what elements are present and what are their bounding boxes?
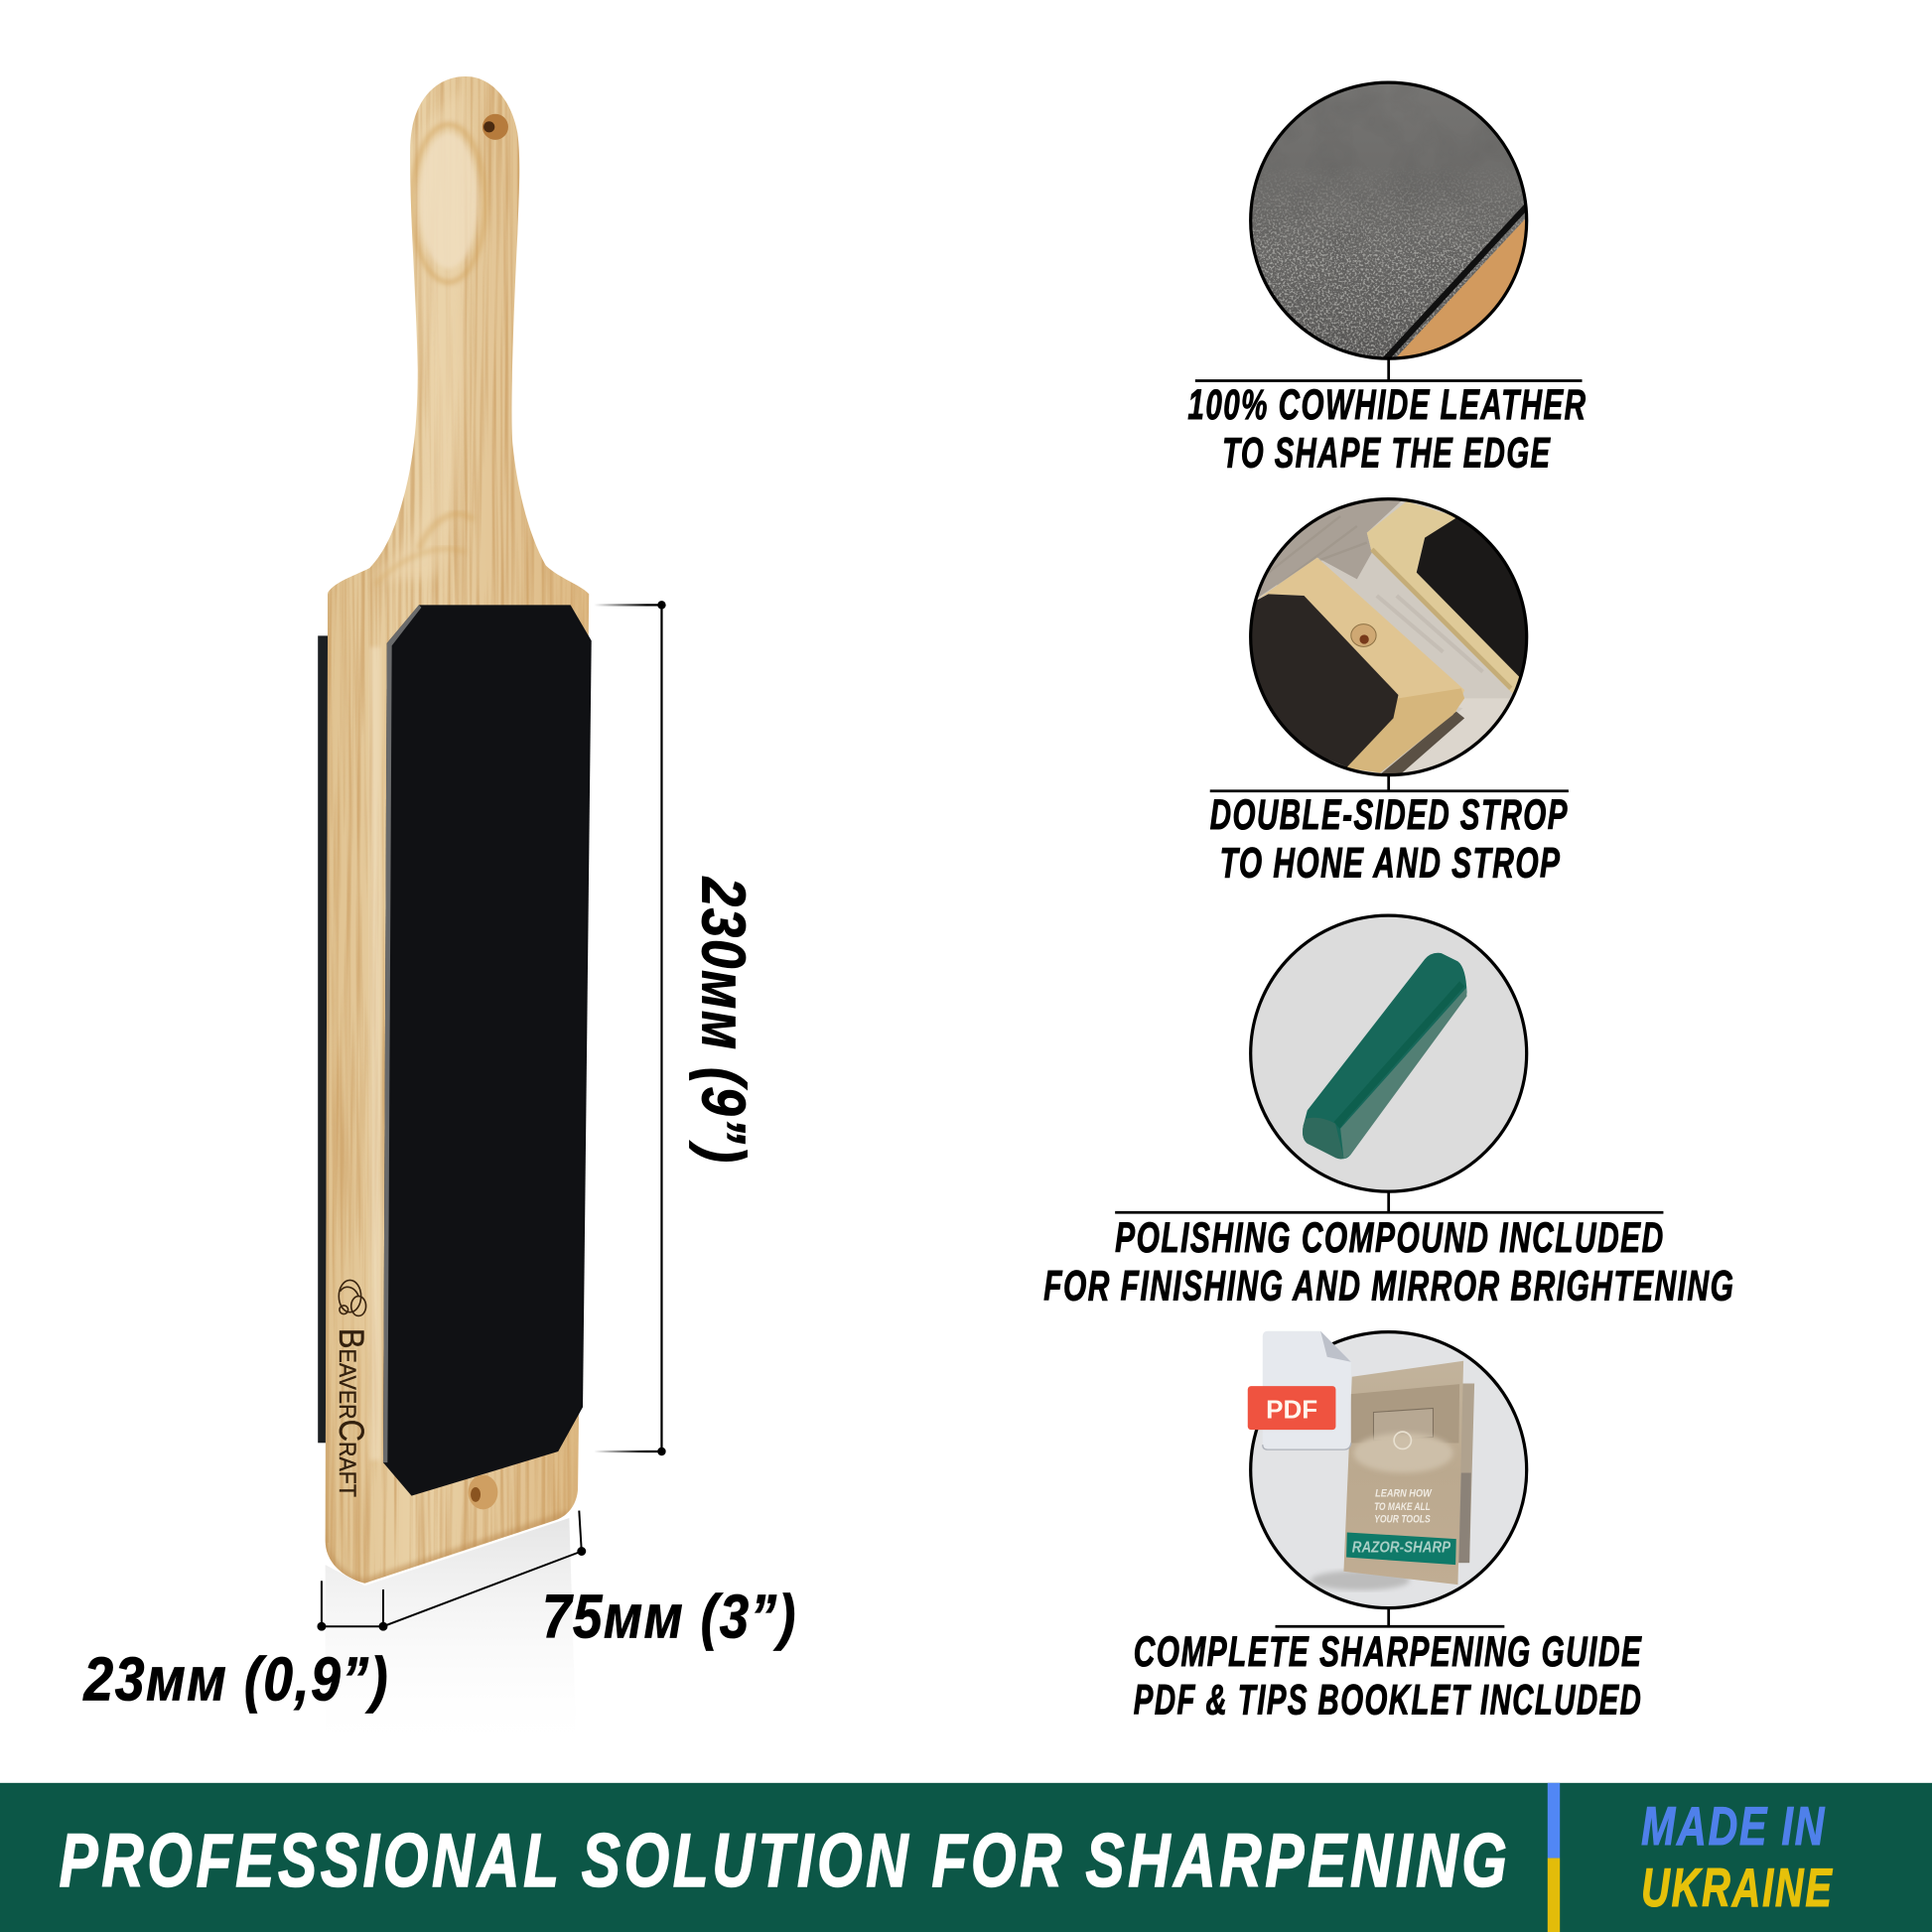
leader line (1115, 1191, 1663, 1212)
bottom banner (0, 1783, 1932, 1932)
engraved brand name: BeaverCraft (332, 1328, 369, 1497)
Ukraine label: UKRAINE (1641, 1858, 1834, 1918)
circle photo: booklet: TO MAKE ALL (1374, 1501, 1431, 1513)
width label: 75мм (3”) (542, 1583, 797, 1651)
icon: PDF file: PDF (1266, 1394, 1317, 1424)
leather strop paddle (314, 68, 598, 1595)
made in label: MADE IN (1641, 1796, 1826, 1857)
circle photo: leather close-up (1252, 83, 1525, 357)
caption: TO SHAPE THE EDGE (1222, 429, 1552, 476)
circle photo: green compound bar (1252, 917, 1525, 1189)
feature: sharpening guide (1134, 1324, 1642, 1723)
feature: double-sided strop (1210, 493, 1569, 887)
circle photo: two strops (1252, 500, 1525, 773)
feature: cowhide leather (1187, 73, 1587, 476)
caption: TO HONE AND STROP (1220, 840, 1561, 887)
wooden paddle body (326, 76, 589, 1584)
leather face (383, 605, 592, 1496)
caption (1043, 1214, 1734, 1309)
feature: polishing compound (1043, 911, 1734, 1309)
caption (1134, 1628, 1642, 1723)
caption: 100% COWHIDE LEATHER (1187, 381, 1587, 428)
caption (1187, 381, 1587, 476)
banner slogan: PROFESSIONAL SOLUTION FOR SHARPENING (60, 1819, 1511, 1903)
icon: PDF file (1248, 1331, 1351, 1449)
circle photo: booklet (1252, 1333, 1525, 1606)
leader line (1276, 1608, 1504, 1626)
depth label: 23мм (0,9”) (83, 1646, 389, 1715)
caption (1210, 791, 1569, 887)
caption: COMPLETE SHARPENING GUIDE (1134, 1628, 1642, 1675)
height dimension line (594, 601, 666, 1455)
caption: DOUBLE-SIDED STROP (1210, 791, 1569, 838)
flag divider (1548, 1783, 1560, 1932)
back leather edge (318, 635, 329, 1443)
leader line (1210, 775, 1569, 791)
height label: 230мм (9”) (688, 877, 757, 1165)
circle photo: booklet: LEARN HOW (1375, 1487, 1433, 1499)
caption: POLISHING COMPOUND INCLUDED (1115, 1214, 1665, 1261)
caption: PDF & TIPS BOOKLET INCLUDED (1134, 1676, 1642, 1723)
hanging hole (483, 114, 508, 140)
bottom screw hole (469, 1475, 497, 1509)
wood grain (314, 68, 598, 1595)
engraved logo (339, 1280, 366, 1315)
paddle reflection (326, 1518, 577, 1756)
width and depth dimension lines (318, 1511, 585, 1630)
circle photo: booklet: YOUR TOOLS (1374, 1513, 1431, 1525)
leader line (1195, 358, 1583, 380)
circle photo: booklet: RAZOR-SHARP (1352, 1539, 1451, 1556)
